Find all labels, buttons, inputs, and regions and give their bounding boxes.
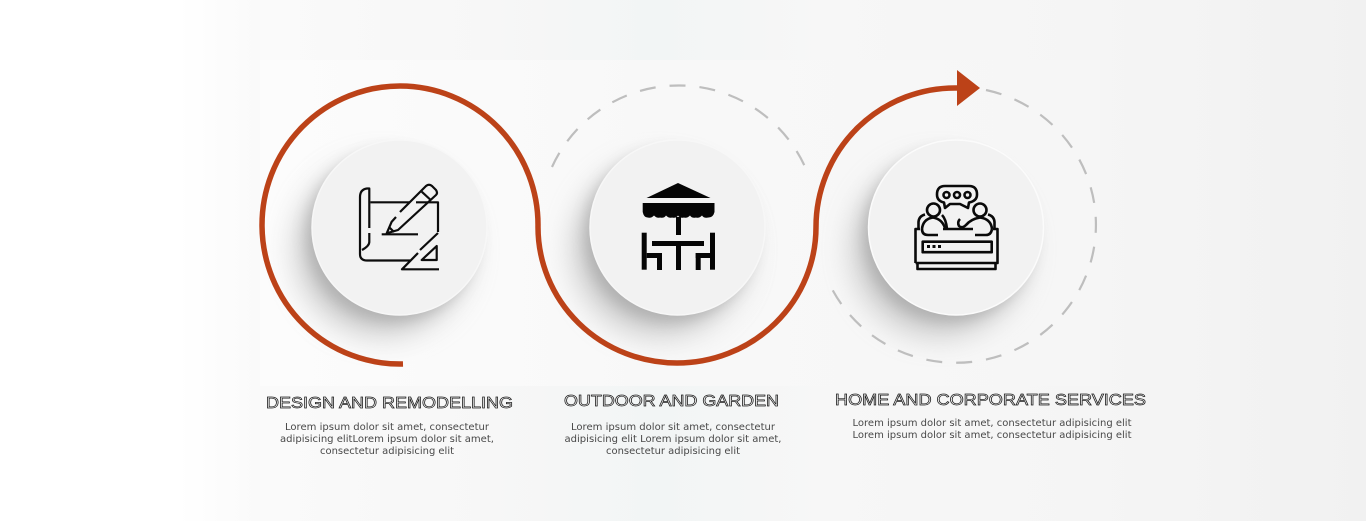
arrow head xyxy=(957,70,980,106)
circle 1 xyxy=(312,140,487,315)
heading: design and remodelling: DESIGN AND REMODELLING xyxy=(266,395,513,412)
text block: home: Lorem ipsum dolor sit amet, consectetur adipisicing elit xyxy=(852,430,1132,441)
shadow: circle 2 xyxy=(574,150,756,335)
text block: outdoor: Lorem ipsum dolor sit amet, consectetur xyxy=(571,422,776,433)
circle 2 xyxy=(590,140,765,315)
icon dots: desk label xyxy=(927,245,941,248)
text block: design: Lorem ipsum dolor sit amet, consectetur xyxy=(285,422,490,433)
icon: meeting at a desk xyxy=(916,186,998,269)
text block: design xyxy=(280,422,494,457)
shadow: circle 3 xyxy=(853,150,1035,335)
text block: home: Lorem ipsum dolor sit amet, consectetur adipisicing elit xyxy=(852,418,1132,429)
text block: outdoor: consectetur adipisicing elit xyxy=(606,446,740,457)
red winding path xyxy=(262,86,958,364)
dashed arc: right of circle 3 xyxy=(829,90,1096,363)
icon: blueprint and pencil xyxy=(360,185,439,269)
dashed arc: top of circle 2 xyxy=(552,85,806,169)
text block: design: adipisicing elitLorem ipsum dolor sit amet, xyxy=(280,434,494,445)
text block: design: consectetur adipisicing elit xyxy=(320,446,454,457)
heading: home and corporate services: HOME AND CORPORATE SERVICES xyxy=(835,392,1146,409)
text block: home xyxy=(852,418,1132,441)
text block: outdoor xyxy=(564,422,782,457)
circle 3 xyxy=(868,140,1044,315)
shadow: circle 1 xyxy=(296,150,478,335)
icon: patio umbrella and table xyxy=(642,183,715,270)
heading: outdoor and garden: OUTDOOR AND GARDEN xyxy=(564,393,779,410)
text block: outdoor: adipisicing elit Lorem ipsum dolor sit amet, xyxy=(564,434,782,445)
